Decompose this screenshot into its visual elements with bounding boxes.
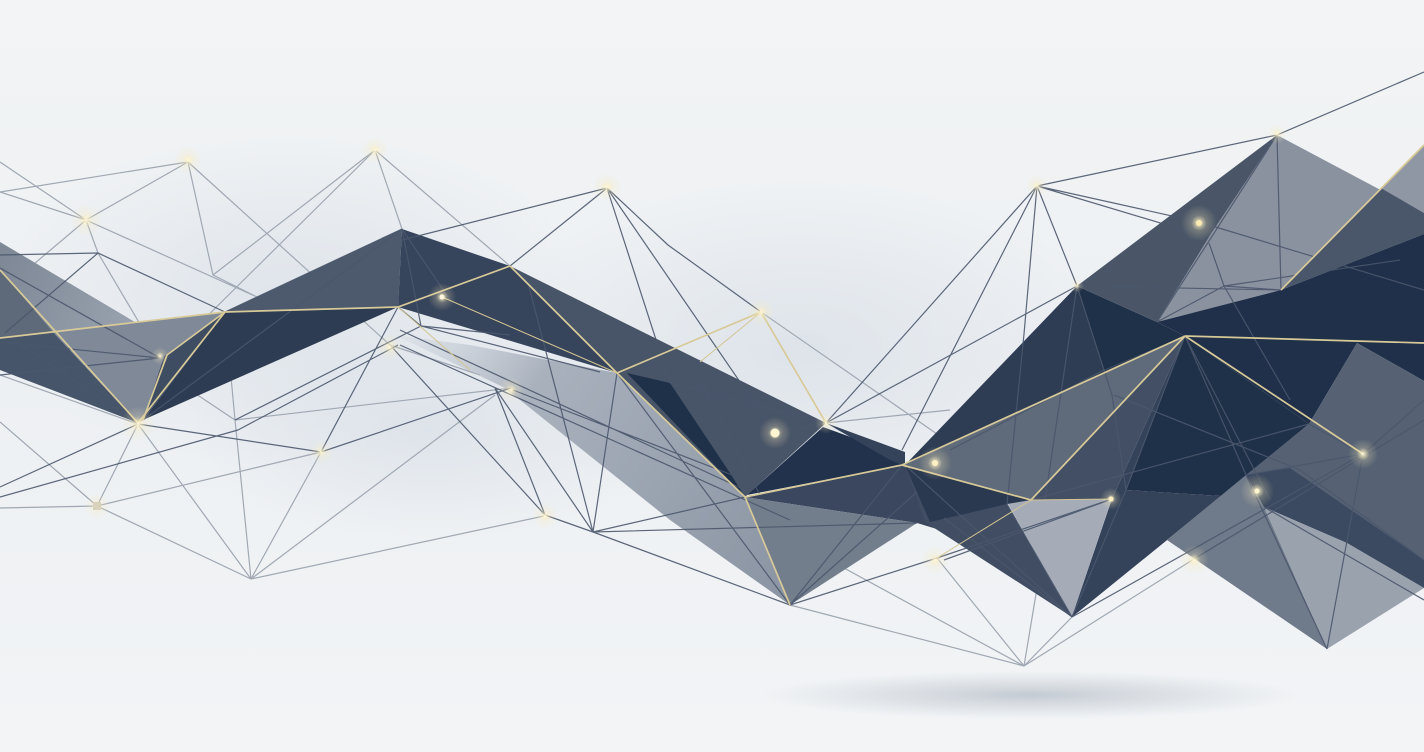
glowing nodes (70, 124, 1378, 575)
wireframe: dark lines (0, 72, 1424, 649)
right mass facets (905, 135, 1424, 649)
wireframe: gold lines (0, 145, 1424, 605)
descending band facets (398, 229, 960, 605)
background haze (0, 130, 1120, 540)
rising band facets (143, 229, 402, 420)
wireframe: thin gold lines (398, 297, 1112, 558)
lower grey facet (395, 335, 790, 605)
floor shadow (760, 671, 1300, 719)
left ribbon facets (0, 242, 225, 423)
polygon ribbon (0, 135, 1424, 649)
wireframe: back light lines (0, 150, 1194, 666)
